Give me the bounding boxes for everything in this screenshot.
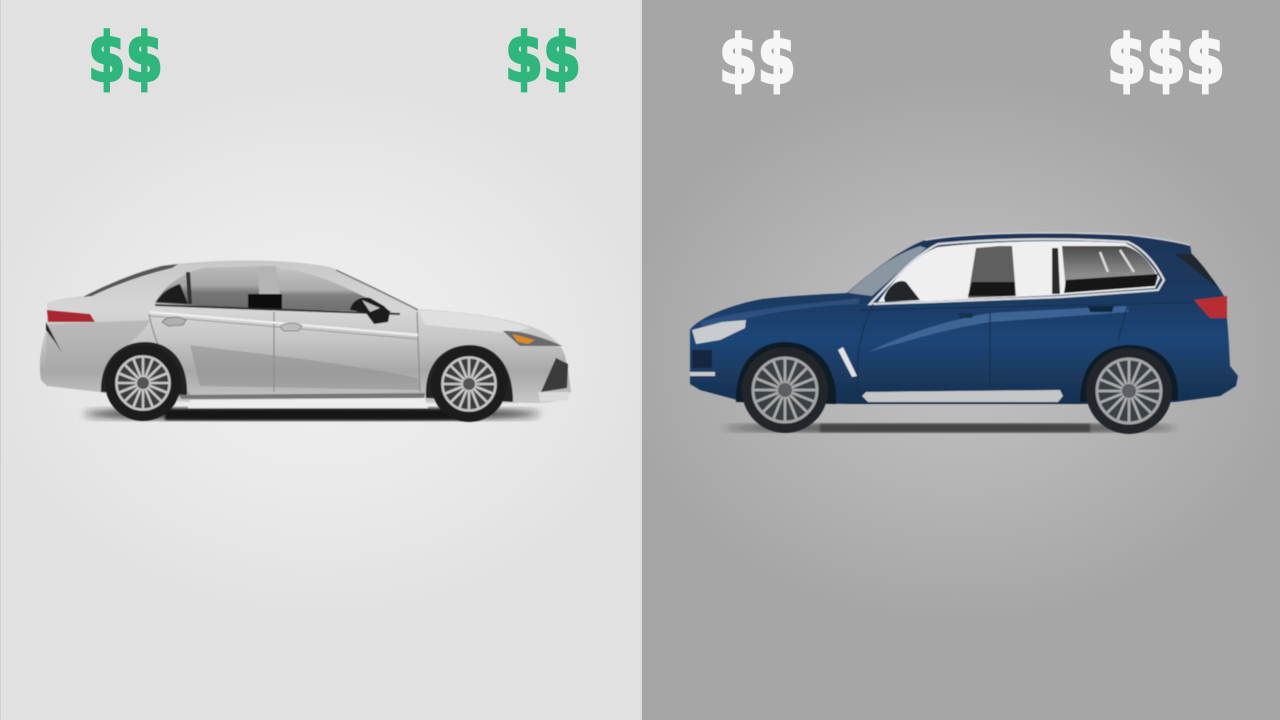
windshield xyxy=(848,246,926,296)
hood highlight xyxy=(418,310,530,333)
side windows xyxy=(155,266,260,309)
door crease highlight xyxy=(868,306,1128,352)
cost label: SUV purchase price: $$ xyxy=(719,21,796,100)
car body xyxy=(690,233,1238,404)
rear wheel xyxy=(1086,348,1172,434)
car body xyxy=(40,260,571,403)
front wheel xyxy=(431,346,507,422)
headlight xyxy=(692,320,746,344)
roof highlight xyxy=(925,233,1190,245)
side windows xyxy=(878,241,1160,302)
tail light xyxy=(1194,296,1227,318)
hood highlight xyxy=(700,298,860,330)
rear window strip xyxy=(83,264,178,297)
rear deck shade xyxy=(45,320,150,375)
front wheel xyxy=(742,347,828,433)
panel: right background xyxy=(640,0,1280,720)
blue SUV xyxy=(690,233,1238,434)
cost label: SUV running cost: $$$ xyxy=(1107,21,1225,100)
panel: left background xyxy=(0,0,640,720)
cost label: sedan purchase price: $$ xyxy=(88,19,163,98)
door lines and handles xyxy=(149,312,420,395)
side mirror xyxy=(350,298,390,324)
window chrome trim xyxy=(870,239,1164,304)
running board xyxy=(862,390,1063,402)
front grille xyxy=(541,358,568,392)
tail light xyxy=(47,310,95,322)
door lines and handles xyxy=(857,304,1128,396)
front bumper details xyxy=(690,372,715,376)
rear quarter glass xyxy=(1175,254,1218,288)
silver sedan xyxy=(40,260,571,422)
rocker highlight xyxy=(188,398,428,408)
wheel arches xyxy=(101,342,187,395)
rear wheel xyxy=(105,345,181,421)
wheel arches xyxy=(736,342,836,404)
lower body shade xyxy=(190,345,420,390)
ground shadow xyxy=(724,424,1176,432)
cost label: sedan running cost: $$ xyxy=(505,19,581,98)
fender vent xyxy=(838,347,857,377)
ground shadow xyxy=(84,408,540,420)
headlight xyxy=(503,331,562,346)
side mirror xyxy=(884,281,920,302)
